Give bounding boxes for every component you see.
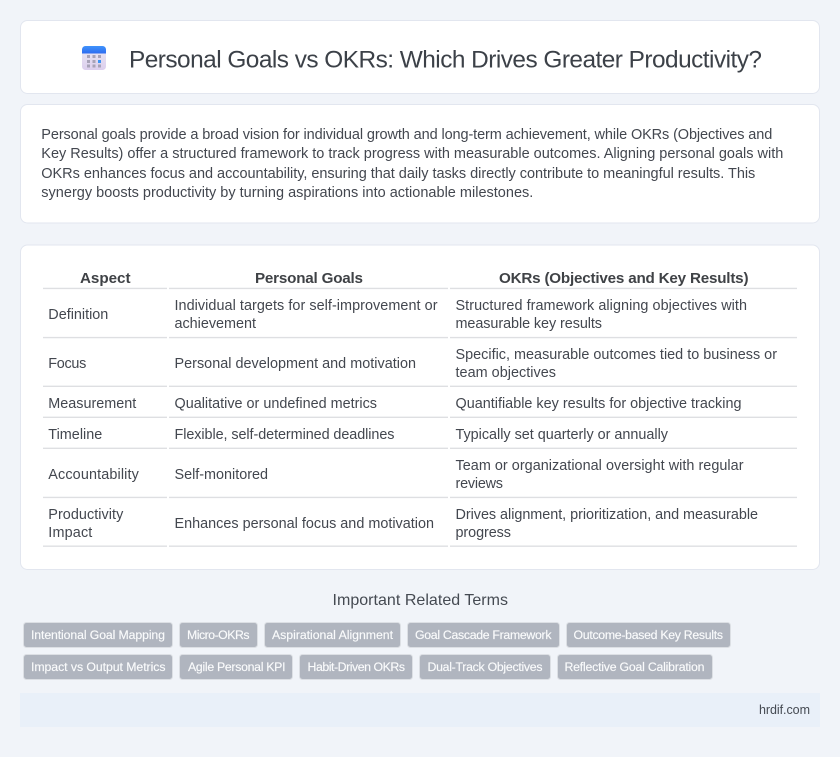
- row: definition: Structured framework aligning objectives with: [456, 298, 747, 314]
- row: accountability: Team or organizational oversight with regular: [456, 458, 744, 474]
- tag: Micro-OKRs: Micro-OKRs: [187, 628, 250, 642]
- row: focus: Focus: [48, 356, 86, 372]
- row: accountability: [48, 458, 744, 492]
- tag: Dual-Track Objectives: Dual-Track Objectives: [428, 660, 542, 674]
- title: Personal Goals vs OKRs: Which Drives Greater Productivity?: [129, 46, 762, 74]
- row: definition: Definition: [48, 307, 108, 323]
- intro paragraph: synergy boosts productivity by turning aspirations into actionable milestones.: [41, 185, 533, 201]
- tag: Agile Personal KPI: Agile Personal KPI: [188, 660, 286, 674]
- tag: Goal Cascade Framework: [408, 622, 560, 648]
- row: productivity impact: Enhances personal focus and motivation: [174, 516, 434, 532]
- row: accountability: Self-monitored: [174, 467, 268, 483]
- table header row: [80, 270, 748, 287]
- tag: Impact vs Output Metrics: [24, 654, 172, 680]
- tag: Outcome-based Key Results: [566, 622, 730, 648]
- row: measurement: Qualitative or undefined metrics: [174, 396, 377, 412]
- row: measurement: Measurement: [48, 396, 136, 412]
- tag: Dual-Track Objectives: [420, 654, 550, 680]
- header panel: [20, 20, 820, 94]
- row: accountability: reviews: [456, 476, 503, 492]
- tag: Micro-OKRs: [180, 622, 258, 648]
- row: definition: [48, 298, 747, 332]
- footer source: hrdif.com: [759, 703, 810, 717]
- related terms tags: [24, 622, 730, 680]
- row: measurement: [48, 396, 742, 412]
- tag: Aspirational Alignment: Aspirational Alignment: [272, 628, 394, 642]
- tag: Reflective Goal Calibration: Reflective Goal Calibration: [564, 660, 705, 674]
- table header row: Personal Goals: [255, 270, 363, 287]
- tag: Agile Personal KPI: [180, 654, 292, 680]
- intro paragraph: Key Results) offer a structured framework to track progress with measurable outcomes. Aligning personal goals with: [41, 146, 783, 162]
- row: productivity impact: progress: [456, 525, 511, 541]
- related terms heading: Important Related Terms: [332, 592, 508, 609]
- row: focus: Personal development and motivation: [174, 356, 416, 372]
- row: productivity impact: Drives alignment, prioritization, and measurable: [456, 507, 758, 523]
- tag: Intentional Goal Mapping: [24, 622, 172, 648]
- row: productivity impact: Impact: [48, 525, 92, 541]
- row: timeline: Timeline: [48, 427, 102, 443]
- table header row: OKRs (Objectives and Key Results): [499, 270, 748, 287]
- row: focus: team objectives: [456, 365, 556, 381]
- tag: Habit-Driven OKRs: [300, 654, 412, 680]
- row: definition: achievement: [174, 316, 256, 332]
- intro paragraph: Personal goals provide a broad vision for individual growth and long-term achievement, while OKRs (Objectives and: [41, 127, 772, 143]
- tag: Reflective Goal Calibration: [558, 654, 712, 680]
- intro paragraph: OKRs enhances focus and accountability, ensuring that daily tasks directly contribute to meaningful results. This: [41, 166, 755, 182]
- row: productivity impact: [48, 507, 758, 541]
- tag: Aspirational Alignment: [264, 622, 400, 648]
- row: accountability: Accountability: [48, 467, 140, 483]
- row: productivity impact: Productivity: [48, 507, 124, 523]
- tag: Outcome-based Key Results: Outcome-based Key Results: [574, 628, 723, 642]
- row: definition: measurable key results: [456, 316, 602, 332]
- tag: Habit-Driven OKRs: Habit-Driven OKRs: [308, 660, 405, 674]
- table header row: Aspect: [80, 270, 130, 287]
- icon: calendar: [82, 46, 106, 70]
- row: measurement: Quantifiable key results for objective tracking: [456, 396, 742, 412]
- footer bar: [20, 693, 820, 727]
- tag: Goal Cascade Framework: Goal Cascade Framework: [415, 628, 552, 642]
- intro text panel: [20, 104, 820, 223]
- row: definition: Individual targets for self-improvement or: [174, 298, 438, 314]
- row: timeline: [48, 427, 669, 443]
- tag: Impact vs Output Metrics: Impact vs Output Metrics: [31, 660, 166, 674]
- row: timeline: Typically set quarterly or annually: [456, 427, 669, 443]
- comparison table panel: [20, 245, 820, 570]
- row: focus: Specific, measurable outcomes tied to business or: [456, 347, 777, 363]
- tag: Intentional Goal Mapping: Intentional Goal Mapping: [31, 628, 165, 642]
- row: timeline: Flexible, self-determined deadlines: [174, 427, 394, 443]
- row: focus: [48, 347, 777, 381]
- intro paragraph: [41, 127, 783, 201]
